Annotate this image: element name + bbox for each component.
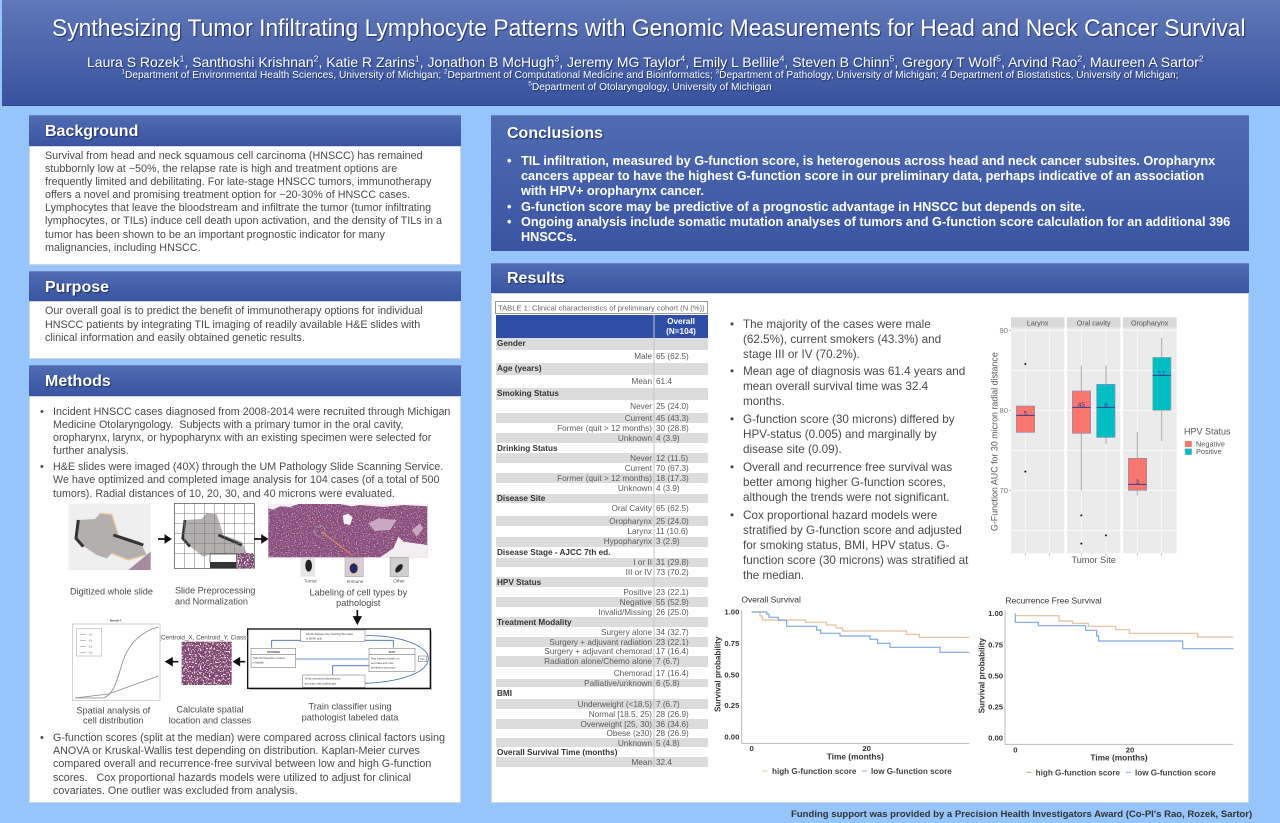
- step: calculate spatial location: [Centroid_X, Centroid_Y, Class]: [159, 635, 248, 642]
- section: smoking status: [497, 389, 689, 443]
- affiliations: [122, 69, 1179, 94]
- bullet: cohort: Medicine Otolaryngology. Subjects with a primary tumor in the oral cavity,: [53, 419, 403, 431]
- section: disease site: 11 (10.6): [656, 527, 688, 536]
- box: oral cavity negative: [1072, 366, 1091, 545]
- section: drinking status: 18 (17.3): [656, 474, 689, 483]
- background text: Survival from head and neck squamous cell carcinoma (HNSCC) has remained: [45, 150, 423, 162]
- section: treatment modality: Surgery + adjuvant chemorad: [544, 647, 652, 656]
- legend: high G-function score: [772, 767, 857, 776]
- chart: recurrence free survival: [977, 596, 1234, 777]
- heading: methods: [29, 365, 461, 396]
- section: smoking status: 30 (28.8): [656, 424, 689, 433]
- finding: cox models: [730, 509, 968, 582]
- table 1: clinical characteristics: [495, 301, 708, 767]
- bullet: cohort: Incident HNSCC cases diagnosed from 2008-2014 were recruited through Michigan: [53, 406, 450, 418]
- section: disease site: 65 (62.5): [656, 504, 689, 513]
- finding: cox models: function score (30 microns) was stratified at: [743, 554, 968, 567]
- heading: background: [29, 115, 461, 146]
- background body: [29, 146, 461, 265]
- finding: g-function by hpv: G-function score (30 microns) differed by: [743, 413, 955, 426]
- section: bmi: 28 (26.9): [656, 710, 689, 719]
- section: smoking status: 45 (43.3): [656, 414, 689, 423]
- finding: demographics: [730, 318, 941, 361]
- background text: lymphocytes, or TILs) induce cell death upon activation, and the density of TILs in a: [45, 215, 442, 227]
- bullet: statistics: •: [40, 732, 44, 744]
- facet: larynx: Larynx: [1027, 319, 1049, 327]
- section: bmi: Unknown: [618, 739, 652, 748]
- section: treatment modality: Chemorad: [614, 669, 652, 678]
- step: digitized whole slide: [68, 504, 153, 596]
- purpose text: [45, 305, 423, 344]
- section: overall survival time: Mean: [632, 758, 652, 767]
- box: oropharynx positive: [1153, 338, 1171, 441]
- background text: [45, 150, 442, 254]
- x axis labels: 20: [1126, 745, 1134, 754]
- section: treatment modality: 17 (16.4): [656, 669, 689, 678]
- section: bmi: 7 (6.7): [656, 700, 680, 709]
- affiliations: 1Department of Environmental Health Sciences, University of Michigan; 2Department of Computational Medicine and Bioinformatics; 3Department of Pathology, University of Michigan; 4 Department of Biostatistics, University of Michigan;: [122, 69, 1178, 81]
- step: train classifier diagram: Verify detection/classification: [305, 677, 341, 681]
- step: train classifier diagram: pathologist labeled data: [302, 713, 399, 723]
- affiliations: 5Department of Otolaryngology, University of Michigan: [528, 81, 772, 93]
- box: larynx negative: [1016, 363, 1035, 473]
- results findings bullets: [730, 318, 968, 582]
- finding: age and survival time: [730, 365, 965, 408]
- finding: g-function by hpv: HPV-status (0.005) and marginally by: [743, 428, 937, 441]
- header banner: [2, 0, 1280, 106]
- legend: hpv status: Positive: [1196, 447, 1222, 456]
- bullet: imaging: [40, 461, 443, 500]
- table header: Overall: [667, 317, 695, 326]
- finding: survival trends: •: [730, 461, 734, 474]
- section: age: [497, 364, 672, 386]
- facet: oropharynx: Oropharynx: [1131, 319, 1169, 327]
- section: bmi: 36 (34.6): [656, 720, 689, 729]
- box plot: g-function by tumor site: [989, 317, 1231, 565]
- step: cell type labeling: Labeling of cell types by: [309, 587, 408, 597]
- section: disease site: Oral Cavity: [612, 504, 653, 513]
- x axis labels: [750, 744, 884, 761]
- finding: age and survival time: months.: [743, 395, 785, 408]
- y axis title: Survival probability: [714, 636, 723, 712]
- section: hpv status: Positive: [623, 588, 652, 597]
- finding: age and survival time: •: [730, 365, 734, 378]
- step: train classifier diagram: test data and note: [371, 661, 394, 665]
- y axis: 70: [999, 486, 1008, 495]
- arrow: preprocessing to labeling: [254, 536, 267, 542]
- section: hpv status: 26 (25.0): [656, 608, 689, 617]
- background text: malignancies, including HNSCC.: [45, 242, 201, 254]
- step: preprocessing grid: and Normalization: [175, 597, 248, 607]
- conclusions bullets: TIL infiltration, measured by G-function score, is heterogenous across head and neck cancer subsites. Oropharynx: [521, 154, 1215, 168]
- legend: hpv status: Negative: [1196, 439, 1225, 448]
- table header: (N=104): [666, 327, 696, 336]
- chart title: Recurrence Free Survival: [1005, 596, 1102, 606]
- finding: cox models: the median.: [743, 569, 804, 582]
- bullet: statistics: compared overall and recurrence-free survival between low and high G-function: [53, 758, 431, 770]
- section: hpv status: Negative: [620, 598, 652, 607]
- section: disease site: 25 (24.0): [656, 517, 689, 526]
- step: spatial analysis chart: -Cx-: [88, 644, 93, 648]
- background text: offers a novel and promising treatment option for ~20-30% of HNSCC cases.: [45, 189, 410, 201]
- section: smoking status: Unknown: [618, 434, 652, 443]
- section: hpv status: 55 (52.9): [656, 598, 689, 607]
- step: cell type labeling: Other: [393, 578, 405, 583]
- y axis labels: 1.00: [988, 609, 1003, 618]
- legend: low G-function score: [1135, 768, 1216, 777]
- finding: demographics: stage III or IV (70.2%).: [743, 348, 860, 361]
- finding: survival trends: [730, 461, 952, 504]
- step: train classifier diagram: Train All Classifier models: [252, 656, 285, 660]
- arrow: labeling to classifier: [354, 610, 361, 623]
- section: age: Mean: [632, 377, 652, 386]
- step: spatial analysis chart: -Cx-: [88, 632, 93, 636]
- panel: purpose: [29, 271, 461, 359]
- step: calculate spatial location: Calculate spatial: [176, 705, 244, 715]
- methods body: [29, 396, 461, 803]
- finding: survival trends: better among higher G-function scores,: [743, 476, 946, 489]
- section: disease stage: 31 (29.8): [656, 558, 689, 567]
- y axis labels: 0.50: [724, 670, 739, 679]
- curve: low g-function: [1015, 613, 1233, 649]
- conclusions bullets: G-function score may be predictive of a prognostic advantage in HNSCC but depends on site.: [521, 200, 1085, 214]
- heading: methods: Methods: [45, 373, 111, 390]
- bullet: cohort: further analysis.: [53, 445, 129, 457]
- y axis labels: 0.00: [988, 734, 1003, 743]
- section: drinking status: 4 (3.9): [656, 484, 680, 493]
- step: cell type labeling: [268, 504, 427, 608]
- section: treatment modality: Treatment Modality: [497, 618, 572, 627]
- step: train classifier diagram: Run trained models on: [371, 656, 400, 660]
- x axis labels: Time (months): [1090, 753, 1148, 763]
- image analysis workflow figure: [68, 503, 432, 726]
- section: hpv status: HPV Status: [497, 578, 542, 587]
- y axis labels: 0.50: [988, 671, 1003, 680]
- box: oral cavity negative: 45: [1078, 402, 1085, 409]
- row stripes: [496, 338, 708, 767]
- section: disease site: Hypopharynx: [604, 537, 652, 546]
- section: smoking status: Current: [625, 414, 653, 423]
- chart title: Overall Survival: [741, 594, 801, 604]
- section: smoking status: Never: [630, 402, 652, 411]
- authors: Laura S Rozek1, Santhoshi Krishnan2, Katie R Zarins1, Jonathon B McHugh3, Jeremy MG Taylor4, Emily L Bellile4, Steven B Chinn5, Gregory T Wolf5, Arvind Rao2, Maureen A Sartor2: [87, 53, 1204, 70]
- step: cell type labeling: Tumor: [304, 578, 317, 583]
- section: overall survival time: 32.4: [656, 758, 672, 767]
- background text: tumor has been shown to be an important prognostic indicator for many: [45, 229, 385, 241]
- step: train classifier diagram: Yes: [420, 657, 425, 661]
- panel: methods: [29, 365, 461, 803]
- section: bmi: Overweight [25, 30): [581, 720, 652, 729]
- section: drinking status: 70 (67.3): [656, 464, 689, 473]
- section: bmi: [497, 689, 689, 748]
- y axis title: Survival probability: [977, 637, 986, 713]
- step: train classifier diagram: in 60/40 split: [306, 636, 322, 640]
- y axis labels: 0.25: [724, 701, 740, 710]
- purpose body: [29, 301, 461, 359]
- purpose text: clinical information and easily obtained genetic results.: [45, 332, 305, 344]
- heading: results: [491, 263, 1249, 293]
- column divider: [653, 315, 655, 767]
- x axis labels: Time (months): [827, 751, 884, 761]
- title: Synthesizing Tumor Infiltrating Lymphocyte Patterns with Genomic Measurements for Head and Neck Cancer Survival: [52, 15, 1246, 42]
- section: treatment modality: Surgery + adjuvant radiation: [549, 638, 652, 647]
- step: spatial analysis chart: Spatial analysis of: [76, 706, 151, 716]
- section: gender: Male: [634, 352, 652, 361]
- heading: purpose: [29, 271, 461, 301]
- section: drinking status: 12 (11.5): [656, 454, 688, 463]
- x axis labels: [1013, 745, 1148, 763]
- section: disease site: Larynx: [627, 527, 652, 536]
- bullet: imaging: tumors). Radial distances of 10, 20, 30, and 40 microns were evaluated.: [53, 488, 395, 500]
- section: disease site: Oropharynx: [609, 517, 652, 526]
- legend: low G-function score: [871, 767, 952, 776]
- section: smoking status: 4 (3.9): [656, 434, 680, 443]
- finding: cox models: for smoking status, BMI, HPV status. G-: [743, 539, 950, 552]
- y axis: 90: [999, 326, 1008, 335]
- y axis: 80: [999, 406, 1008, 415]
- step: train classifier diagram: Train classifier using: [308, 701, 392, 711]
- axes: [1005, 610, 1233, 744]
- x axis title: Tumor Site: [1071, 555, 1116, 565]
- bullet: imaging: H&E slides were imaged (40X) through the UM Pathology Slide Scanning Service.: [53, 461, 443, 473]
- facet: oral cavity: Oral cavity: [1077, 319, 1111, 327]
- heading: background: Background: [45, 123, 138, 140]
- y axis labels: 0.75: [988, 640, 1004, 649]
- finding: demographics: The majority of the cases were male: [743, 318, 931, 331]
- bullet: cohort: •: [40, 406, 44, 418]
- section: bmi: Underweight (<18.5): [578, 700, 652, 709]
- section: gender: [497, 339, 689, 361]
- arrow: classifier to spatial location: [234, 658, 245, 665]
- section: drinking status: [497, 444, 689, 493]
- step: calculate spatial location: location and classes: [169, 716, 252, 726]
- section: bmi: 28 (26.9): [656, 729, 689, 738]
- step: calculate spatial location: [159, 635, 252, 726]
- step: train classifier diagram: [248, 629, 432, 723]
- section: disease site: Disease Site: [497, 494, 546, 503]
- curve: high g-function: [1015, 616, 1233, 637]
- facet: oral cavity: [1067, 317, 1120, 553]
- step: train classifier diagram: TRAINING: [266, 650, 281, 654]
- conclusions bullets: cancers appear to have the highest G-function score in our preliminary data, perhaps indicative of an association: [521, 169, 1204, 183]
- section: hpv status: Invalid/Missing: [598, 608, 652, 617]
- bullet: imaging: We have optimized and completed image analysis for 104 cases (of a total of 500: [53, 474, 439, 486]
- section: bmi: Normal [18.5, 25): [589, 710, 652, 719]
- section: disease site: [497, 494, 689, 546]
- section: disease stage: III or IV: [626, 568, 653, 577]
- section: treatment modality: [497, 618, 689, 688]
- step: preprocessing grid: [174, 503, 255, 607]
- section: treatment modality: 34 (32.7): [656, 628, 689, 637]
- curve: low g-function: [752, 612, 969, 652]
- y axis labels: 0.25: [988, 702, 1004, 711]
- finding: g-function by hpv: disease site (0.09).: [743, 443, 842, 456]
- section: age: 61.4: [656, 377, 672, 386]
- step: spatial analysis chart: -Cx-: [88, 638, 93, 642]
- box: oral cavity positive: 6: [1104, 402, 1108, 409]
- bullet: statistics: scores. Cox proportional hazards models were utilized to adjust for clinical: [53, 772, 411, 784]
- section: treatment modality: 7 (6.7): [656, 657, 680, 666]
- step: spatial analysis chart: Normal-T: [110, 619, 122, 623]
- y axis labels: [724, 608, 740, 741]
- section: treatment modality: 17 (16.4): [656, 647, 689, 656]
- section: age: Age (years): [497, 364, 542, 373]
- step: cell type labeling: pathologist: [336, 598, 381, 608]
- results body: [491, 293, 1249, 803]
- purpose text: HNSCC patients by integrating TIL imaging of readily available H&E slides with: [45, 318, 420, 330]
- table caption: TABLE 1: Clinical characteristics of preliminary cohort (N (%)): [498, 304, 705, 312]
- heading: results: Results: [507, 270, 565, 287]
- conclusions bullets: •: [507, 154, 511, 168]
- facet: oropharynx: [1123, 317, 1177, 553]
- background text: Lymphocytes that leave the bloodstream and infiltrate the tumor (tumor infiltrating: [45, 202, 431, 214]
- section: smoking status: 25 (24.0): [656, 402, 689, 411]
- finding: cox models: •: [730, 509, 734, 522]
- section: drinking status: Never: [630, 454, 652, 463]
- step: train classifier diagram: Divide Dataset into Training/Test data: [306, 632, 353, 636]
- y axis title: G-Function AUC for 30 micron radial distance: [989, 352, 999, 531]
- funding note: Funding support was provided by a Precision Health Investigators Award (Co-PI's Rao, Rozek, Sartor): [791, 809, 1252, 820]
- conclusions bullets: •: [507, 200, 511, 214]
- bullet: cohort: oropharynx, larynx, or hypopharynx with an existing specimen were selected for: [53, 432, 431, 444]
- bullet: statistics: ANOVA or Kruskal-Wallis test depending on distribution. Kaplan-Meier curves: [53, 745, 420, 757]
- conclusions bullets: •: [507, 215, 511, 229]
- conclusions bullets: with HPV+ oropharynx cancer.: [521, 184, 704, 198]
- arrow: slide to preprocessing: [158, 536, 170, 542]
- y axis labels: 1.00: [724, 608, 739, 617]
- section: treatment modality: 6 (5.8): [656, 679, 680, 688]
- step: train classifier diagram: in Matlab: [252, 661, 264, 665]
- section: bmi: BMI: [497, 689, 512, 698]
- background text: frequently limited and debilitating. For late-stage HNSCC tumors, immunotherapy: [45, 176, 432, 188]
- conclusions bullets: HNSCCs.: [521, 230, 577, 244]
- legend: [763, 767, 952, 776]
- section: disease stage: I or II: [633, 558, 652, 567]
- y axis labels: 0.00: [724, 732, 739, 741]
- finding: age and survival time: Mean age of diagnosis was 61.4 years and: [743, 365, 965, 378]
- finding: cox models: Cox proportional hazard models were: [743, 509, 937, 522]
- section: treatment modality: Radiation alone/Chemo alone: [544, 657, 652, 666]
- y axis labels: [988, 609, 1004, 743]
- section: treatment modality: Palliative/unknown: [584, 679, 652, 688]
- conclusions bullets: [507, 154, 1230, 244]
- curve: high g-function: [752, 612, 969, 637]
- section: hpv status: [497, 578, 689, 617]
- arrow: spatial location to spatial analysis: [166, 658, 178, 665]
- section: bmi: Obese (≥30): [607, 729, 652, 738]
- legend: hpv status: HPV Status: [1184, 426, 1231, 436]
- section: gender: Gender: [497, 339, 526, 348]
- finding: g-function by hpv: [730, 413, 955, 456]
- box: oropharynx negative: [1128, 432, 1147, 496]
- legend: [1027, 768, 1216, 777]
- chart: overall survival: [714, 594, 970, 776]
- section: drinking status: Drinking Status: [497, 444, 558, 453]
- bullet: cohort: [40, 406, 450, 457]
- bullet: statistics: G-function scores (split at the median) were compared across clinical factors using: [53, 732, 445, 744]
- table header: [496, 315, 708, 338]
- legend: hpv status: [1184, 426, 1231, 456]
- section: treatment modality: Surgery alone: [601, 628, 652, 637]
- finding: g-function by hpv: •: [730, 413, 734, 426]
- bullet: statistics: [40, 732, 445, 797]
- conclusions bullets: Ongoing analysis include somatic mutation analyses of tumors and G-function score calculation for an additional 396: [521, 215, 1230, 229]
- legend: high G-function score: [1036, 768, 1121, 777]
- section: bmi: 5 (4.8): [656, 739, 680, 748]
- x axis labels: 0: [750, 744, 754, 753]
- step: cell type labeling: Immune: [347, 579, 364, 584]
- section: drinking status: Unknown: [618, 484, 652, 493]
- section: disease stage: Disease Stage - AJCC 7th ed.: [497, 548, 610, 557]
- finding: age and survival time: mean overall survival time was 32.4: [743, 380, 928, 393]
- step: preprocessing grid: Slide Preprocessing: [175, 586, 255, 596]
- x axis labels: 0: [1013, 745, 1017, 754]
- step: train classifier diagram: TEST: [388, 650, 396, 654]
- section: drinking status: Former (quit > 12 months): [557, 474, 652, 483]
- step: spatial analysis chart: cell distribution: [83, 716, 144, 726]
- bullet: imaging: •: [40, 461, 44, 473]
- y axis: [999, 326, 1008, 495]
- box: oropharynx negative: 3: [1136, 479, 1140, 486]
- section: smoking status: Former (quit > 12 months): [557, 424, 652, 433]
- section: overall survival time: Overall Survival Time (months): [497, 748, 618, 757]
- box: oral cavity positive: [1097, 366, 1115, 536]
- step: spatial analysis chart: -Cx-: [88, 651, 93, 655]
- section: overall survival time: [497, 748, 672, 767]
- facet: larynx: [1011, 317, 1064, 553]
- background text: stubbornly low at ~50%, the relapse rate is high and treatment options are: [45, 163, 397, 175]
- step: spatial analysis chart: [72, 619, 160, 726]
- x axis labels: 20: [862, 744, 871, 753]
- section: hpv status: 23 (22.1): [656, 588, 689, 597]
- heading: purpose: Purpose: [45, 279, 109, 296]
- box: larynx negative: 5: [1024, 410, 1028, 417]
- section: treatment modality: 23 (22.1): [656, 638, 689, 647]
- panel: background: [29, 115, 461, 265]
- heading: conclusions: Conclusions: [507, 125, 603, 142]
- finding: demographics: (62.5%), current smokers (43.3%) and: [743, 333, 941, 346]
- box: oropharynx positive: 17: [1158, 370, 1166, 377]
- finding: survival trends: although the trends were not significant.: [743, 491, 950, 504]
- section: drinking status: Current: [625, 464, 653, 473]
- finding: cox models: stratified by G-function score and adjusted: [743, 524, 962, 537]
- section: disease stage: 73 (70.2): [656, 568, 689, 577]
- axes: [742, 610, 969, 743]
- step: digitized whole slide: Digitized whole slide: [70, 586, 153, 596]
- section: disease site: 3 (2.9): [656, 537, 680, 546]
- finding: survival trends: Overall and recurrence free survival was: [743, 461, 952, 474]
- step: train classifier diagram: accuracy with pathologist: [305, 681, 336, 685]
- section: disease stage: [497, 548, 689, 577]
- section: gender: 65 (62.5): [656, 352, 689, 361]
- bullet: statistics: covariates. One outlier was excluded from analysis.: [53, 785, 298, 797]
- panel: conclusions: [491, 115, 1249, 251]
- purpose text: Our overall goal is to predict the benefit of immunotherapy options for individual: [45, 305, 423, 317]
- step: train classifier diagram: prediction accuracy: [371, 666, 396, 670]
- finding: demographics: •: [730, 318, 734, 331]
- y axis labels: 0.75: [724, 639, 740, 648]
- section: smoking status: Smoking Status: [497, 389, 559, 398]
